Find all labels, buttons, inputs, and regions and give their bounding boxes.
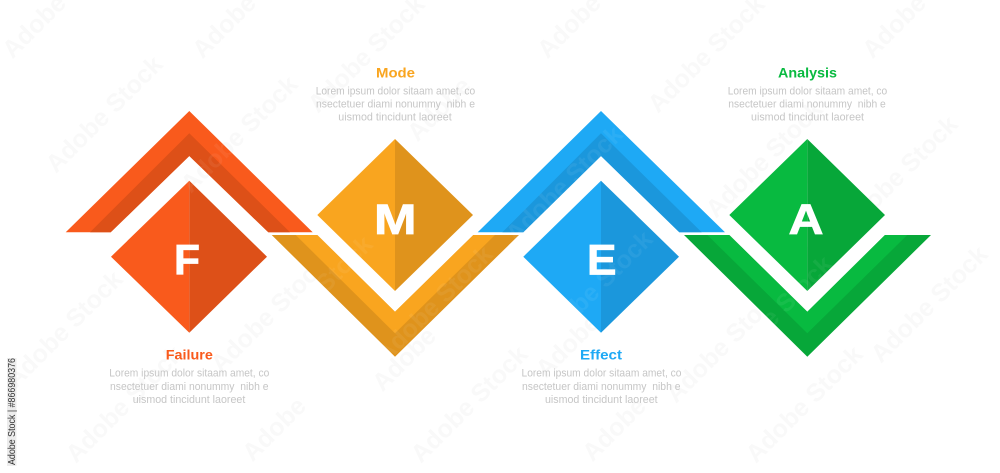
text block: Effect description (522, 368, 682, 406)
text block: Effect description: Lorem ipsum dolor sitaam amet, co (522, 368, 682, 380)
stock watermark: Adobe Stock (405, 340, 533, 468)
text block: Mode description: uismod tincidunt laoreet (338, 112, 452, 124)
stock watermark: Adobe Stock (60, 340, 188, 468)
diamond: M (317, 139, 473, 291)
stock watermark: Adobe Stock (865, 240, 993, 368)
text block: Failure description: uismod tincidunt laoreet (133, 394, 245, 406)
text block: Effect description: uismod tincidunt laoreet (545, 394, 658, 406)
panel: Effect (478, 111, 725, 406)
text block: Failure description: Lorem ipsum dolor sitaam amet, co (109, 368, 269, 380)
stock watermark: Adobe Stock (205, 250, 333, 378)
stock watermark overlay on shapes: Adobe Stock (500, 120, 628, 248)
image ID side label: Adobe Stock | #866980376 (7, 358, 18, 465)
stock watermark: Adobe Stock (530, 255, 658, 383)
heading: Analysis: Analysis (778, 65, 837, 81)
text block: Analysis description: uismod tincidunt laoreet (751, 112, 864, 124)
heading: Mode: Mode (376, 65, 415, 81)
text block: Analysis description: Lorem ipsum dolor sitaam amet, co (728, 86, 887, 98)
stock watermark: Adobe (237, 392, 312, 467)
text block: Mode description: nsectetuer diami nonummy nibh e (316, 99, 475, 111)
text block: Mode description (316, 86, 475, 124)
diamond: A: A (788, 196, 824, 244)
diamond: F: F (174, 236, 200, 284)
stock watermark: Adobe Stock (175, 70, 303, 198)
heading: Effect: Effect (580, 346, 622, 362)
text block: Analysis description: nsectetuer diami nonummy nibh e (728, 99, 886, 111)
stock watermark: Adobe Stock (835, 110, 963, 238)
stock watermark: Adobe Stock (700, 95, 828, 223)
chevron: green, pointing down (684, 235, 931, 357)
stock watermark overlay on shapes: Adobe Stock (370, 240, 498, 368)
chevron: orange, pointing down (272, 235, 519, 357)
stock watermark overlay on shapes: Adobe Stock (175, 70, 303, 198)
diamond: A (729, 139, 885, 291)
panel: Failure (66, 111, 313, 406)
stock watermark: Adobe (402, 72, 477, 147)
heading: Failure: Failure (166, 346, 213, 362)
diamond: M: M (374, 196, 416, 244)
stock watermark overlay on shapes: Adobe Stock (250, 230, 378, 358)
stock watermark: Adobe Stock (660, 280, 788, 408)
stock watermark: Adobe Stock (40, 50, 168, 178)
stock watermark: Adobe (577, 392, 652, 467)
diamond: E: E (587, 236, 616, 284)
text block: Failure description (109, 368, 269, 406)
chevron: red, pointing up (66, 111, 313, 232)
stock watermark overlay on shapes (175, 70, 838, 378)
stock watermark: Adobe Stock (0, 265, 128, 393)
stock watermark: Adobe (367, 322, 442, 397)
text block: Analysis description (728, 86, 887, 124)
panel: Mode (272, 65, 519, 357)
stock watermark overlay on shapes: Adobe Stock (530, 225, 658, 353)
chevron: blue, pointing up (478, 111, 725, 232)
diamond: E (523, 181, 679, 333)
stock watermark overlay on shapes: Adobe Stock (710, 250, 838, 378)
text block: Failure description: nsectetuer diami nonummy nibh e (110, 381, 268, 393)
stock watermark: Adobe Stock (740, 340, 868, 468)
panel: Analysis (684, 65, 931, 357)
text block: Effect description: nsectetuer diami nonummy nibh e (522, 381, 680, 393)
stock watermark overlay on shapes: Adobe Stock (700, 95, 828, 223)
text block: Mode description: Lorem ipsum dolor sitaam amet, co (316, 86, 475, 98)
diamond: F (111, 181, 267, 333)
